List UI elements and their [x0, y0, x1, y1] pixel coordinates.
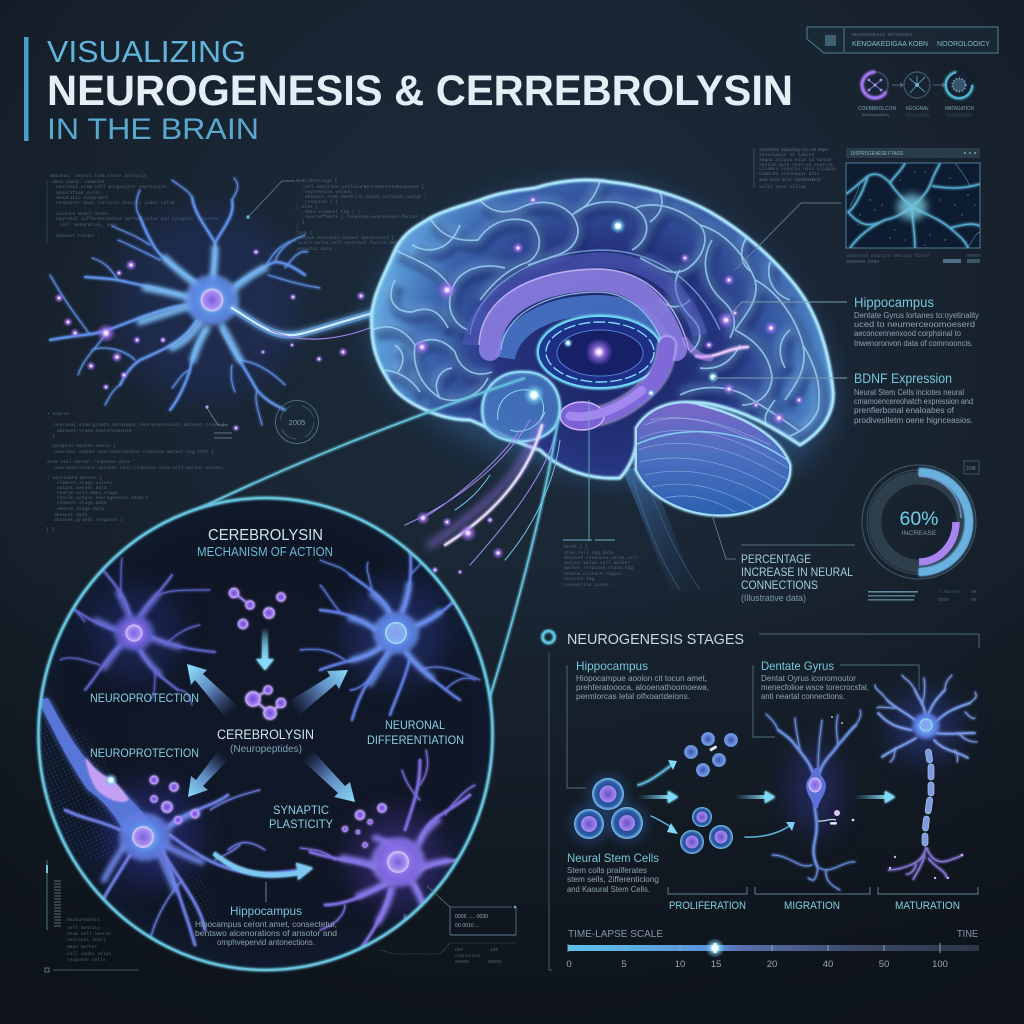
panel: readout box: [381, 886, 516, 965]
micro text: left lower block: neuroexpression.dataset.cell.response.stem.cell.marker.values.: [54, 465, 225, 471]
arrow: to neuroprotection top: [187, 664, 238, 718]
micro text: left lower block: : neurodata.marker [: [47, 475, 102, 481]
center label: [217, 727, 314, 755]
micro text: left lower block: result.output.neurogenesis.stem.Y: [57, 495, 148, 501]
panel: micrograph: observed neurite density field: [846, 253, 929, 259]
micro text: left top block: [47, 173, 219, 244]
axon to brain: [232, 308, 490, 360]
peptides lower left: [150, 776, 199, 824]
chart: 60% donut: 60%: [899, 508, 939, 530]
text: neural stem cells: Neural Stem Cells: [567, 851, 659, 865]
chart: lower left scale: stem cell neural: [67, 931, 111, 937]
gyri folds: [372, 182, 823, 446]
micro text: center top block: dataset.stem dendrite.spine.cellular.value ;: [305, 194, 426, 200]
badge: neurology tag: NEUROGENESIS REFERENCE: [852, 32, 913, 38]
icon: cerebrolysin molecule: [862, 72, 888, 98]
micro text: upper right: ullamco laboris nisi aliquip: [759, 166, 836, 172]
brain halo: [372, 182, 833, 490]
micro text: below brain: FEATK [ ]: [563, 544, 588, 550]
icon: neuron: [904, 72, 930, 98]
title block: IN THE BRAIN: [47, 113, 259, 146]
micro text: left lower block: neuronal.output.neuroexpression.response.marker.tag.THYT ].: [54, 449, 217, 455]
micro text: left top block: dataset.render ;: [56, 233, 100, 239]
timeline: time-lapse scale: 0: [566, 959, 572, 970]
badge: 2005 dial: [205, 400, 318, 444]
text: neural stem cells: and Kaoural Stem Cells.: [567, 885, 650, 894]
micro text: left lower block: output.marker.data ;: [57, 485, 112, 491]
arrow: to differentiation: [288, 670, 348, 716]
timeline: time-lapse scale: 20: [767, 959, 777, 970]
neuron: mature: [875, 675, 977, 880]
micro text: left top block: cell maturation, axon: [60, 222, 118, 228]
callout: BDNF expression: Neural Stem Cells inciotes neural: [854, 388, 964, 397]
micro text: center top block: response { } ;: [305, 199, 344, 205]
micro text: center top block: synaptic data ;: [296, 246, 337, 252]
lens labels: NEUROPROTECTION: [90, 746, 199, 760]
hippocampus caption: omphvepervid antonections.: [217, 938, 315, 947]
text: hippocampus stage: permlorcas letal olfxoartdeions.: [576, 692, 690, 701]
title block: VISUALIZING: [47, 34, 246, 69]
timeline: time-lapse scale: [566, 928, 979, 970]
micro text: left lower block: element.stage.values: [57, 480, 112, 486]
micro text: center top block: } else {: [296, 204, 318, 210]
nerve stream: [405, 420, 560, 586]
micro text: upper right: veniam quis nostrud exercit: [759, 162, 834, 168]
lens labels: DIFFERENTIATION: [367, 735, 464, 747]
arrows: stage flow: [638, 760, 895, 837]
text: neural stem cells: stem seils, 2ifferenticlong: [567, 875, 659, 884]
chart: lower left scale: mean marker: [67, 944, 98, 950]
callout: BDNF expression: BDNF Expression: [854, 371, 952, 386]
stage brackets and labels: MIGRATION: [784, 900, 840, 912]
timeline: time-lapse scale: 100: [932, 959, 948, 970]
panel: micrograph: 0000000 0000: [846, 259, 879, 265]
lens outline: [38, 498, 492, 970]
center label: (Neuropeptides): [230, 744, 302, 755]
text: hippocampus stage: Hiopocampue aoolon cit tocun amet,: [576, 674, 707, 683]
micro text: upper right: incididunt ut labore: [759, 152, 814, 158]
text: dentate gyrus stage: menecfolioe wsce torecrocsfal,: [761, 683, 869, 692]
chart legend bars: 00: [971, 589, 977, 595]
micro text: left lower block: [46, 412, 225, 533]
chart: lower left scale: cell index value: [67, 951, 111, 957]
lens labels: [90, 691, 464, 831]
arrow: synaptic: [213, 852, 313, 880]
callout: hippocampus: Hippocampus: [854, 295, 934, 310]
panel: readout box: 00 0010 ...: [455, 923, 480, 929]
section heading: neurogenesis stages: NEUROGENESIS STAGES: [567, 631, 744, 648]
chart: lower left scale: cell density: [67, 925, 100, 931]
arrow: to lower right: [302, 750, 355, 802]
badge: neurology tag: [807, 27, 998, 53]
callout: hippocampus: uced to neumerceoomoeserd: [854, 320, 975, 329]
callout: percentage increase: CONNECTIONS: [741, 580, 818, 592]
micro text: left top block: neuronal stem cell progenitor expression: [56, 184, 167, 190]
badge: neurology tag: NOOROLOOICY: [937, 39, 990, 48]
chart legend bars: / Ainstr: [938, 589, 960, 595]
micro text: left top block: culture model index: [56, 211, 109, 217]
callout: BDNF expression: cmamoencereohatch expression and: [854, 397, 973, 406]
micro text: upper right: consectetur adipiscing elit sed tempor: [759, 147, 829, 153]
timeline: time-lapse scale: 10: [675, 959, 685, 970]
callout: percentage increase: PERCENTAGE: [741, 554, 811, 566]
hippocampus caption: Hipocampus ceront amet, consectetur,: [195, 920, 337, 929]
callout cone lines: [188, 378, 558, 700]
micro text: left lower block: neuron.stage.data: [57, 506, 104, 512]
text: neural stem cells: Stem colls praiiferates: [567, 866, 647, 875]
neuron: lens top right: [300, 550, 480, 720]
text: neural stem cells: [567, 851, 659, 894]
timeline: time-lapse scale: TINE: [957, 928, 978, 940]
neuron: lens top left: [60, 558, 215, 705]
icon labels: KEOGNAL: [906, 106, 929, 112]
micro text: center top block: data.element.tag ( ): [305, 209, 360, 215]
micro text: below brain: connection.index ...: [564, 582, 619, 588]
icon: maturation: [946, 72, 972, 98]
lens labels: SYNAPTIC: [273, 805, 329, 817]
stage brackets and labels: MATURATION: [895, 900, 960, 912]
hippocampus caption: Hippocampus: [230, 904, 302, 918]
micro text: left lower block: dataset.growth.response [: [54, 517, 123, 523]
lens labels: PLASTICITY: [269, 819, 333, 831]
micro text: upper right: commodo consequat duis: [759, 171, 820, 177]
micro text: upper right: magna aliqua enim ad minim: [759, 157, 831, 163]
micro text: upper right: velit esse cillum: [759, 184, 806, 190]
micro text: center top block: [296, 178, 426, 252]
micro text: below brain: [563, 400, 639, 588]
lens title: MECHANISM OF ACTION: [197, 545, 333, 559]
micro text: upper right: [754, 147, 836, 190]
arrow: to lower left: [188, 751, 228, 797]
title block: [24, 34, 793, 146]
chart legend bars: OOOH: [938, 597, 949, 603]
text: hippocampus stage: [567, 659, 709, 788]
panel: readout box: 00000: [455, 959, 469, 965]
spark dots: [54, 248, 366, 391]
panel: lens mechanism of action: [7, 498, 492, 970]
micro text: left top block: neuronal differentiation marker value and synaptic response: [56, 216, 219, 222]
timeline: time-lapse scale: TIME-LAPSE SCALE: [568, 928, 663, 940]
micro text: upper right: aute irure dolor reprehenderit: [759, 177, 821, 183]
stage brackets and labels: PROLIFERATION: [669, 900, 746, 912]
text: dentate gyrus stage: [753, 659, 919, 737]
micro text: below brain: marker.response.state.tag: [564, 565, 633, 571]
micro text: left lower block: synaptic.marker.neuro ]: [52, 443, 115, 449]
icon labels: (Neuropeptides): [862, 113, 890, 117]
icon labels: COEBBROLCON: [858, 106, 896, 112]
micro text: center top block: }: [296, 224, 299, 230]
panel: readout box: 100: [490, 947, 499, 953]
icon labels: MATAGATION: [945, 106, 974, 112]
callout: BDNF expression: [713, 371, 973, 425]
neuron: lens bottom right: [300, 750, 475, 950]
chart: lower left scale: neuronal level: [67, 937, 106, 943]
chart legend bars: 00: [971, 597, 977, 603]
callout: percentage increase: [712, 515, 855, 603]
hippocampus: [560, 340, 748, 430]
callout: BDNF expression: prodiveslletm oene hignceasios.: [854, 416, 973, 425]
lens labels: NEURONAL: [385, 720, 446, 732]
micro text: left lower block: Stem.cell.marker.response.data ': [47, 459, 135, 465]
panel: micrograph: [846, 148, 981, 265]
peptide molecules: [229, 588, 286, 629]
panel: readout box: CEP: [455, 947, 464, 953]
callout: hippocampus: aeconcennenxood corphsinal to: [854, 329, 962, 338]
cerebrum: [371, 180, 833, 478]
diagram: proliferating cells top: [684, 732, 738, 776]
micro text: left lower block: neuronal.stem.growth.datainput.neuroexpression.dataset.trace [: [54, 422, 225, 428]
micro text: left top block: dendritic outgrowth: [56, 195, 109, 201]
micro text: left lower block: dataset.trace.neuroresponse: [57, 428, 132, 434]
micro text: center top block: cell.decorate.cellularNeuroGenesisResponse [: [303, 184, 425, 190]
center label: CEREBROLYSIN: [217, 727, 314, 742]
neuron: main hero: [50, 178, 490, 425]
callout: hippocampus: [727, 295, 979, 348]
process icons row: [858, 72, 974, 117]
callout: percentage increase: (Illustrative data): [741, 593, 806, 603]
panel: readout box: 0005 ..... 0030: [455, 914, 488, 920]
stage brackets and labels: [668, 887, 978, 912]
callout: micrograph leader: [735, 203, 841, 270]
micro text: center top block: }: [302, 219, 305, 225]
central molecule: [246, 686, 286, 720]
micro text: left top block: data input: samples: [52, 179, 105, 185]
brainstem: [622, 465, 700, 592]
micro text: below brain: dataset.response.value.cell: [564, 555, 639, 561]
chart: 60% donut: JOB: [966, 466, 976, 472]
micro text: below brain: neuron.culture.region: [564, 571, 622, 577]
lens labels: NEUROPROTECTION: [90, 691, 199, 705]
neuron: migrating: [766, 710, 861, 890]
arrow: step one: [892, 83, 903, 87]
timeline: time-lapse scale: 40: [823, 959, 833, 970]
micro text: center top block: expression.values ;: [305, 189, 357, 195]
panel: readout box: connected: [455, 953, 480, 959]
chart legend bars: [868, 589, 977, 603]
text: dentate gyrus stage: anti neartal connections.: [761, 692, 845, 701]
text: hippocampus stage: Hippocampus: [576, 659, 648, 673]
micro text: left lower block: element.stage.data: [57, 500, 107, 506]
hippocampus caption: bentswo alcenorations of ansotor and: [195, 929, 337, 938]
arrow: step two: [933, 83, 945, 87]
micro text: left lower block: ]: [52, 433, 55, 439]
hippocampus caption: [195, 904, 337, 947]
timeline: time-lapse scale: 5: [621, 959, 627, 970]
chart: lower left scale: [45, 860, 139, 972]
temporal bulb: [482, 372, 560, 441]
micro text: below brain: stem.cell.tag.data: [564, 550, 614, 556]
text: dentate gyrus stage: Dentat Oyrus iconomoutor: [761, 674, 856, 683]
text: hippocampus stage: prehferatoooca, alooenathoomoewa,: [576, 683, 709, 692]
micro text: center top block: modelSettings {: [296, 178, 338, 184]
timeline: time-lapse scale: 50: [879, 959, 889, 970]
neuron: lens bottom left: [38, 698, 305, 945]
arrow: down to molecule: [256, 628, 274, 670]
cerebellum: [635, 402, 790, 515]
chart: 60% donut: INCREASE: [902, 530, 937, 537]
callout: hippocampus: Dentate Gyrus lortanes to:oyetinality: [854, 311, 979, 320]
micro text: left top block: quantified cells: [56, 190, 100, 196]
micro text: left lower block: ] ]: [46, 527, 54, 533]
micro text: center top block: form {: [296, 230, 313, 236]
section heading: neurogenesis stages: [542, 631, 979, 970]
chart: 60% donut: [862, 461, 979, 579]
thalamus ring: [538, 316, 662, 388]
micro text: left top block: Dataset: neural stem trace analysis: [50, 173, 147, 179]
brain sparks: [414, 195, 804, 425]
micro text: center top block: output.neuronal.output datarecord [: [298, 235, 395, 241]
badge: 2005 dial: 2005: [289, 418, 305, 427]
chart: lower left scale: response cells: [67, 957, 106, 963]
lens title: CEREBROLYSIN: [208, 527, 323, 544]
callout: neuron annotation: [246, 181, 295, 219]
panel: micrograph: DISPROGENESE FTAGS: [851, 151, 904, 157]
panel: micrograph: 00000: [967, 253, 981, 259]
brain illustration: [371, 180, 833, 592]
micro text: left lower block: • source: [47, 412, 69, 417]
callout: BDNF expression: prenflerbonal enaloabes of: [854, 406, 955, 415]
limbic arcs: [470, 250, 720, 358]
micro text: left lower block: dataset data.: [54, 512, 90, 518]
peptides lower right: [342, 804, 386, 848]
title block: NEUROGENESIS & CERREBROLYSIN: [47, 67, 793, 115]
text: dentate gyrus stage: Dentate Gyrus: [761, 659, 834, 673]
lens title: [197, 527, 333, 559]
panel: readout box: 00000: [488, 959, 502, 965]
diagram: proliferating cells bottom: [680, 807, 733, 854]
micro text: center top block: neuroeffects [ response.expression.factor ]: [305, 214, 424, 220]
chart: lower left scale: measurements: [67, 917, 100, 923]
micro text: left top block: response: mean cortical density index value: [56, 200, 175, 206]
micro text: below brain: output.value.cell.marker: [564, 560, 630, 566]
micro text: below brain: neurons.tag: [564, 576, 595, 582]
callout: hippocampus: Inwenoronvon data of commooncis.: [854, 339, 973, 348]
micro text: left lower block: neuron.cell.data.stage: [57, 490, 118, 496]
callout: percentage increase: INCREASE IN NEURAL: [741, 567, 854, 579]
icon labels: [858, 106, 974, 117]
diagram: stem cells: [568, 772, 650, 846]
timeline: time-lapse scale: 15: [711, 959, 721, 970]
badge: neurology tag: KENOAKEDIGAA KOBN: [852, 39, 928, 48]
micro text: center top block: scale.value.cell.neuronal.factor.dataset ] ;: [298, 240, 419, 246]
